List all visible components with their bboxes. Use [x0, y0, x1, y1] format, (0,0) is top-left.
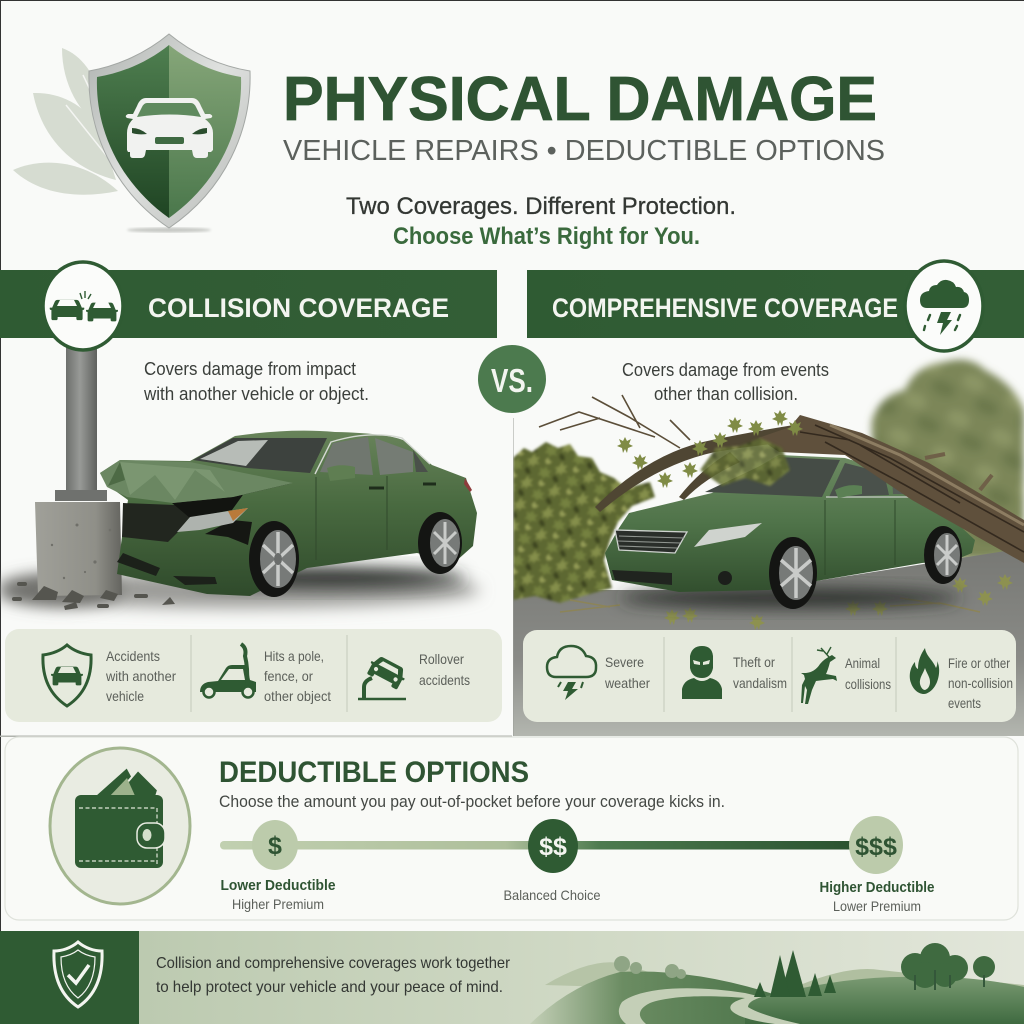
road — [513, 548, 1024, 736]
panel: comprehensive examples — [523, 630, 1016, 722]
text: theft or vandalism: Theft or — [733, 654, 775, 670]
text: rollover: Rollover — [419, 651, 464, 667]
text: hits a pole: fence, or — [264, 668, 313, 684]
text: rollover: accidents — [419, 672, 470, 688]
text: fire: non-collision — [948, 675, 1013, 691]
text: accidents — [105, 648, 176, 704]
ground shadow — [0, 572, 480, 608]
leaves on car — [700, 438, 790, 486]
rubble — [12, 582, 175, 610]
footer text: to help protect your vehicle and your peace of mind. — [156, 979, 503, 996]
text: fire — [948, 655, 1013, 711]
footer text — [156, 955, 511, 996]
icon: shield with car and leaves — [13, 34, 250, 232]
text: theft or vandalism — [733, 654, 787, 691]
text: accidents: with another — [105, 668, 176, 684]
tagline — [346, 193, 736, 250]
subtitle: VEHICLE REPAIRS • DEDUCTIBLE OPTIONS — [283, 135, 885, 167]
concrete texture — [51, 524, 111, 579]
deductible slider: $ — [268, 832, 282, 860]
deductible slider: $$ — [539, 833, 567, 861]
label: lower deductible: Lower Deductible — [220, 877, 336, 894]
text: rollover — [419, 651, 470, 688]
background tree — [872, 360, 1024, 560]
heading: DEDUCTIBLE OPTIONS — [219, 756, 529, 789]
icon: cloud and lightning — [547, 646, 596, 700]
collision description: Covers damage from impact — [144, 359, 356, 379]
comprehensive description: other than collision. — [654, 384, 798, 404]
pole — [66, 345, 97, 491]
label: higher deductible: Lower Premium — [833, 898, 921, 914]
icon: shield with car — [43, 645, 91, 706]
text: hits a pole — [264, 648, 331, 704]
panel: collision examples — [5, 629, 502, 722]
icon: car hitting pole — [200, 644, 256, 698]
icon: rollover — [358, 653, 409, 699]
text: animal collisions: collisions — [845, 676, 891, 692]
VS badge: VS. — [491, 362, 533, 399]
twigs on road — [560, 598, 980, 612]
deductible slider: $$$ — [855, 833, 897, 861]
deductible slider — [220, 816, 903, 874]
tagline: Two Coverages. Different Protection. — [346, 193, 736, 220]
collision description — [143, 359, 369, 404]
title: PHYSICAL DAMAGE — [283, 65, 877, 134]
label: lower deductible — [220, 877, 336, 912]
icon: wallet — [50, 748, 190, 904]
banner: collision coverage: COLLISION COVERAGE — [148, 293, 449, 323]
text: severe weather — [604, 654, 650, 691]
label: balanced choice: Balanced Choice — [504, 887, 601, 903]
text: theft or vandalism: vandalism — [733, 675, 787, 691]
comprehensive description — [622, 360, 829, 404]
shield — [89, 34, 250, 228]
foliage — [513, 442, 655, 603]
fallen tree — [539, 395, 1024, 563]
label: higher deductible — [820, 879, 934, 914]
footer — [0, 931, 1024, 1024]
text: animal collisions — [845, 655, 891, 692]
banner: collision coverage — [0, 262, 497, 350]
undamaged car — [605, 455, 975, 609]
description: Choose the amount you pay out-of-pocket before your coverage kicks in. — [219, 792, 725, 811]
divider — [513, 418, 514, 736]
icon: masked thief — [682, 646, 722, 699]
text: fire: events — [948, 695, 981, 711]
VS badge — [478, 345, 546, 413]
text: fire: Fire or other — [948, 655, 1010, 671]
icon: check shield — [54, 942, 102, 1007]
label: lower deductible: Higher Premium — [232, 896, 324, 912]
tagline: Choose What’s Right for You. — [393, 223, 700, 250]
concrete base — [35, 502, 122, 596]
text: accidents: vehicle — [106, 688, 144, 704]
text: hits a pole: Hits a pole, — [264, 648, 324, 664]
icon: leaping deer — [801, 647, 837, 704]
text: accidents: Accidents — [106, 648, 160, 664]
car front — [126, 98, 213, 158]
panel: comprehensive coverage photo — [512, 360, 1024, 736]
label: higher deductible: Higher Deductible — [820, 879, 934, 896]
text: severe weather: weather — [604, 675, 650, 691]
banner: comprehensive coverage — [527, 261, 1024, 351]
icon: fire — [910, 648, 939, 694]
panel: collision coverage photo — [0, 345, 480, 610]
icon: storm cloud — [905, 261, 983, 351]
collision description: with another vehicle or object. — [143, 384, 369, 404]
text: hits a pole: other object — [264, 688, 331, 704]
comprehensive description: Covers damage from events — [622, 360, 829, 380]
footer text: Collision and comprehensive coverages work together — [156, 955, 511, 972]
text: animal collisions: Animal — [845, 655, 880, 671]
icon: two cars colliding — [43, 262, 123, 350]
banner: comprehensive coverage: COMPREHENSIVE COVERAGE — [552, 293, 898, 323]
crashed car — [100, 431, 477, 597]
landscape — [530, 943, 1024, 1024]
leaves on road — [664, 574, 1013, 630]
text: severe weather: Severe — [605, 654, 644, 670]
panel: deductible options — [0, 736, 1018, 920]
leaves — [13, 48, 118, 195]
